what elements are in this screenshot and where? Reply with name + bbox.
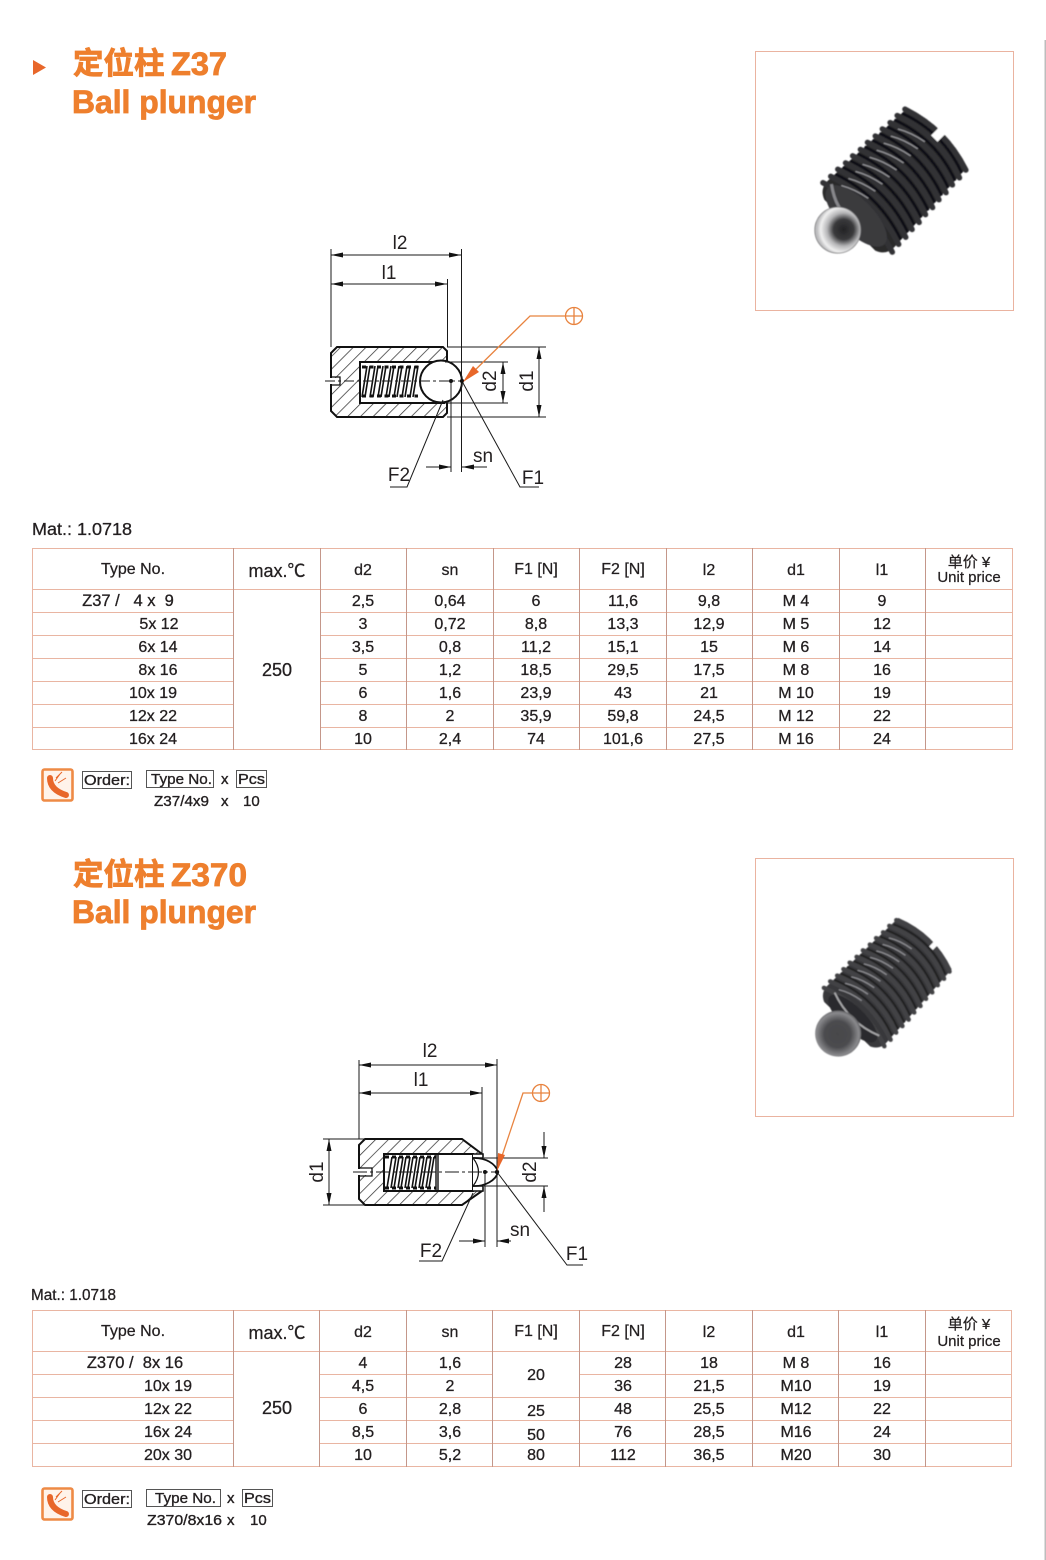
table: Z370 specifications: 12x 22 xyxy=(144,1401,192,1418)
order formula Z37: Type No. xyxy=(151,771,212,788)
table: Z370 specifications: 16 xyxy=(873,1355,891,1372)
title: Z37: Ball plunger xyxy=(72,84,256,120)
table: Z37 specifications: 2,4 xyxy=(439,731,461,748)
table: Z37 specifications: 8 xyxy=(359,708,368,725)
table: Z37 specifications: M 16 xyxy=(778,731,814,748)
table: Z37 specifications: M 5 xyxy=(783,616,809,633)
title: Z370: Z370 xyxy=(171,857,247,893)
order formula Z37: x xyxy=(221,771,229,788)
table: Z37 specifications: 13,3 xyxy=(607,616,639,633)
table: Z37 specifications: 2 xyxy=(446,708,455,725)
table: Z37 specifications: M 12 xyxy=(778,708,814,725)
table: Z37 specifications: 3,5 xyxy=(352,639,374,656)
table: Z37 specifications: 2,5 xyxy=(352,593,374,610)
table: Z37 specifications: 6 xyxy=(359,685,368,702)
technical drawing: Z37 section: l2 xyxy=(393,233,407,254)
table: Z37 specifications: 8,8 xyxy=(525,616,547,633)
table: Z37 specifications: 12,9 xyxy=(693,616,725,633)
table: Z37 specifications: 1,2 xyxy=(439,662,461,679)
table: Z370 specifications: 2 xyxy=(446,1378,455,1395)
order formula Z370: x xyxy=(227,1512,235,1529)
table: Z37 specifications: l2 xyxy=(703,562,715,579)
order formula Z370: x xyxy=(227,1490,235,1507)
table: Z370 specifications: 单价 ¥ xyxy=(948,1316,991,1333)
table: Z370 specifications: M 8 xyxy=(783,1355,809,1372)
table: Z370 specifications: 24 xyxy=(873,1424,891,1441)
table: Z37 specifications: M 6 xyxy=(783,639,809,656)
table: Z37 specifications: 11,2 xyxy=(521,639,551,656)
table: Z370 specifications: 21,5 xyxy=(693,1378,725,1395)
table: Z370 specifications xyxy=(32,1310,1012,1467)
table: Z370 specifications: Z370 / 8x 16 xyxy=(87,1354,183,1372)
title: Z370: Ball plunger xyxy=(72,894,256,930)
table: Z37 specifications: d2 xyxy=(354,562,372,579)
table: Z370 specifications: 25,5 xyxy=(693,1401,725,1418)
table: Z37 specifications: Type No. xyxy=(101,561,165,578)
table: Z370 specifications: 250 xyxy=(262,1398,292,1418)
table: Z37 specifications: 8x 16 xyxy=(138,662,178,679)
table: Z370 specifications: 80 xyxy=(527,1447,545,1464)
technical drawing: Z37 section: F1 xyxy=(522,468,544,489)
table: Z37 specifications: 11,6 xyxy=(608,593,638,610)
icon: order phone Z37 xyxy=(42,770,72,800)
material label Z37: Mat.: 1.0718 xyxy=(32,519,132,539)
technical drawing: Z370 section: F1 xyxy=(566,1244,588,1265)
table: Z37 specifications: 101,6 xyxy=(603,731,643,748)
material label Z370: Mat.: 1.0718 xyxy=(31,1287,116,1304)
table: Z37 specifications: 24 xyxy=(873,731,891,748)
photo panel: Z37 ball plunger xyxy=(756,52,1014,310)
table: Z37 specifications: 16 xyxy=(873,662,891,679)
table: Z37 specifications: M 8 xyxy=(783,662,809,679)
table: Z370 specifications: 36,5 xyxy=(693,1447,725,1464)
title: Z37 xyxy=(72,46,256,120)
table: Z37 specifications: 5x 12 xyxy=(139,616,179,633)
table: Z37 specifications: 59,8 xyxy=(607,708,639,725)
table: Z37 specifications: 18,5 xyxy=(520,662,552,679)
table: Z370 specifications: 3,6 xyxy=(439,1424,461,1441)
table: Z370 specifications: 5,2 xyxy=(439,1447,461,1464)
order formula Z37: Order: xyxy=(84,772,130,789)
table: Z370 specifications: 30 xyxy=(873,1447,891,1464)
order formula Z370 xyxy=(82,1490,272,1529)
table: Z37 specifications: 0,72 xyxy=(434,616,466,633)
table: Z37 specifications: 24,5 xyxy=(693,708,725,725)
table: Z370 specifications: 10x 19 xyxy=(144,1378,192,1395)
table: Z37 specifications: 9 xyxy=(878,593,887,610)
table: Z370 specifications: 36 xyxy=(614,1378,632,1395)
table: Z37 specifications: M 10 xyxy=(778,685,814,702)
table: Z37 specifications: d1 xyxy=(787,562,805,579)
order formula Z370: Z370/8x16 xyxy=(147,1512,222,1529)
table: Z370 specifications: 1,6 xyxy=(439,1355,461,1372)
table: Z370 specifications: 20x 30 xyxy=(144,1447,192,1464)
table: Z37 specifications: 10 xyxy=(354,731,372,748)
table: Z37 specifications: Z37 / 4 x 9 xyxy=(82,592,174,610)
title: Z370 xyxy=(72,857,256,930)
table: Z370 specifications: max.℃ xyxy=(248,1323,306,1343)
table: Z370 specifications: d2 xyxy=(354,1324,372,1341)
table: Z370 specifications: 10 xyxy=(354,1447,372,1464)
order formula Z370: Order: xyxy=(84,1491,130,1508)
technical drawing: Z370 section: l1 xyxy=(414,1070,428,1091)
order formula Z37: Z37/4x9 xyxy=(154,793,209,810)
table: Z37 specifications: 19 xyxy=(873,685,891,702)
table: Z370 specifications: d1 xyxy=(787,1324,805,1341)
technical drawing: Z370 section: d1 xyxy=(307,1161,328,1183)
table: Z370 specifications: 2,8 xyxy=(439,1401,461,1418)
table: Z370 specifications: 22 xyxy=(873,1401,891,1418)
table: Z370 specifications: M12 xyxy=(780,1401,812,1418)
table: Z370 specifications: 8,5 xyxy=(352,1424,374,1441)
table: Z370 specifications: 28,5 xyxy=(693,1424,725,1441)
table: Z37 specifications: 29,5 xyxy=(607,662,639,679)
table: Z370 specifications: 76 xyxy=(614,1424,632,1441)
technical drawing: Z370 section: l2 xyxy=(423,1041,437,1062)
table: Z37 specifications: 0,64 xyxy=(434,593,466,610)
order formula Z370: Type No. xyxy=(155,1490,216,1507)
table: Z370 specifications: 18 xyxy=(700,1355,718,1372)
table: Z37 specifications: 15 xyxy=(700,639,718,656)
table: Z37 specifications: 23,9 xyxy=(520,685,552,702)
technical drawing: Z37 section: d1 xyxy=(517,370,538,392)
technical drawing: Z370 section xyxy=(307,1041,588,1265)
table: Z37 specifications: 74 xyxy=(527,731,545,748)
title: Z37: 定位柱 xyxy=(73,47,164,81)
table: Z37 specifications: l1 xyxy=(876,562,888,579)
title: Z370: 定位柱 xyxy=(73,858,164,892)
photo panel: Z370 ball plunger xyxy=(756,858,1014,1116)
table: Z370 specifications: 50 xyxy=(527,1427,545,1444)
technical drawing: Z37 section: sn xyxy=(473,446,493,467)
order formula Z37: x xyxy=(221,793,229,810)
page edge line xyxy=(1044,40,1046,1560)
technical drawing: Z37 section: F2 xyxy=(388,465,410,486)
table: Z370 specifications: 28 xyxy=(614,1355,632,1372)
table: Z370 specifications: M20 xyxy=(780,1447,812,1464)
table: Z370 specifications: 20 xyxy=(527,1367,545,1384)
table: Z370 specifications: 48 xyxy=(614,1401,632,1418)
table: Z37 specifications: 0,8 xyxy=(439,639,461,656)
table: Z370 specifications: 19 xyxy=(873,1378,891,1395)
table: Z37 specifications: 35,9 xyxy=(520,708,552,725)
table: Z37 specifications: 5 xyxy=(359,662,368,679)
technical drawing: Z37 section xyxy=(325,233,582,489)
table: Z37 specifications: 27,5 xyxy=(693,731,725,748)
table: Z370 specifications: M10 xyxy=(780,1378,812,1395)
table: Z37 specifications: Unit price xyxy=(937,569,1001,586)
table: Z37 specifications: 43 xyxy=(614,685,632,702)
table: Z37 specifications xyxy=(32,548,1012,750)
table: Z37 specifications: sn xyxy=(442,562,458,579)
table: Z370 specifications: 4,5 xyxy=(352,1378,374,1395)
table: Z37 specifications: F1 [N] xyxy=(514,561,558,578)
table: Z37 specifications: M 4 xyxy=(783,593,809,610)
icon: order phone Z370 xyxy=(42,1488,72,1520)
technical drawing: Z37 section: d2 xyxy=(480,370,501,392)
order formula Z37: 10 xyxy=(243,793,260,810)
table: Z37 specifications: 17,5 xyxy=(693,662,725,679)
table: Z370 specifications: sn xyxy=(442,1324,458,1341)
order formula Z37: Pcs xyxy=(238,771,265,788)
table: Z37 specifications: 12 xyxy=(873,616,891,633)
technical drawing: Z37 section: l1 xyxy=(382,263,396,284)
table: Z37 specifications: 250 xyxy=(262,660,292,680)
technical drawing: Z370 section: sn xyxy=(510,1220,530,1241)
table: Z370 specifications: l2 xyxy=(703,1324,715,1341)
order formula Z370: 10 xyxy=(250,1512,267,1529)
marker triangle xyxy=(33,60,46,75)
table: Z37 specifications: max.℃ xyxy=(248,561,306,581)
table: Z37 specifications: 14 xyxy=(873,639,891,656)
table: Z37 specifications: F2 [N] xyxy=(601,561,645,578)
table: Z370 specifications: F1 [N] xyxy=(514,1323,558,1340)
table: Z370 specifications: 6 xyxy=(359,1401,368,1418)
technical drawing: Z370 section: d2 xyxy=(520,1161,541,1183)
table: Z370 specifications: Type No. xyxy=(101,1323,165,1340)
table: Z37 specifications: 单价 ¥ xyxy=(948,554,991,571)
table: Z37 specifications: 12x 22 xyxy=(129,708,177,725)
table: Z37 specifications: 16x 24 xyxy=(129,731,177,748)
table: Z370 specifications: 4 xyxy=(359,1355,368,1372)
table: Z37 specifications: 15,1 xyxy=(607,639,639,656)
table: Z37 specifications: 22 xyxy=(873,708,891,725)
technical drawing: Z370 section: F2 xyxy=(420,1241,442,1262)
table: Z370 specifications: F2 [N] xyxy=(601,1323,645,1340)
table: Z37 specifications: 6x 14 xyxy=(138,639,178,656)
table: Z370 specifications: Unit price xyxy=(937,1333,1001,1350)
table: Z37 specifications: 1,6 xyxy=(439,685,461,702)
table: Z370 specifications: 112 xyxy=(610,1447,636,1464)
title: Z37: Z37 xyxy=(171,46,227,82)
table: Z37 specifications: 3 xyxy=(359,616,368,633)
table: Z37 specifications: 6 xyxy=(532,593,541,610)
table: Z37 specifications: 21 xyxy=(700,685,718,702)
table: Z370 specifications: l1 xyxy=(876,1324,888,1341)
table: Z370 specifications: M16 xyxy=(780,1424,812,1441)
order formula Z370: Pcs xyxy=(244,1490,271,1507)
table: Z370 specifications: 25 xyxy=(527,1403,545,1420)
table: Z370 specifications: 16x 24 xyxy=(144,1424,192,1441)
order formula Z37 xyxy=(82,770,266,810)
table: Z37 specifications: 9,8 xyxy=(698,593,720,610)
table: Z37 specifications: 10x 19 xyxy=(129,685,177,702)
